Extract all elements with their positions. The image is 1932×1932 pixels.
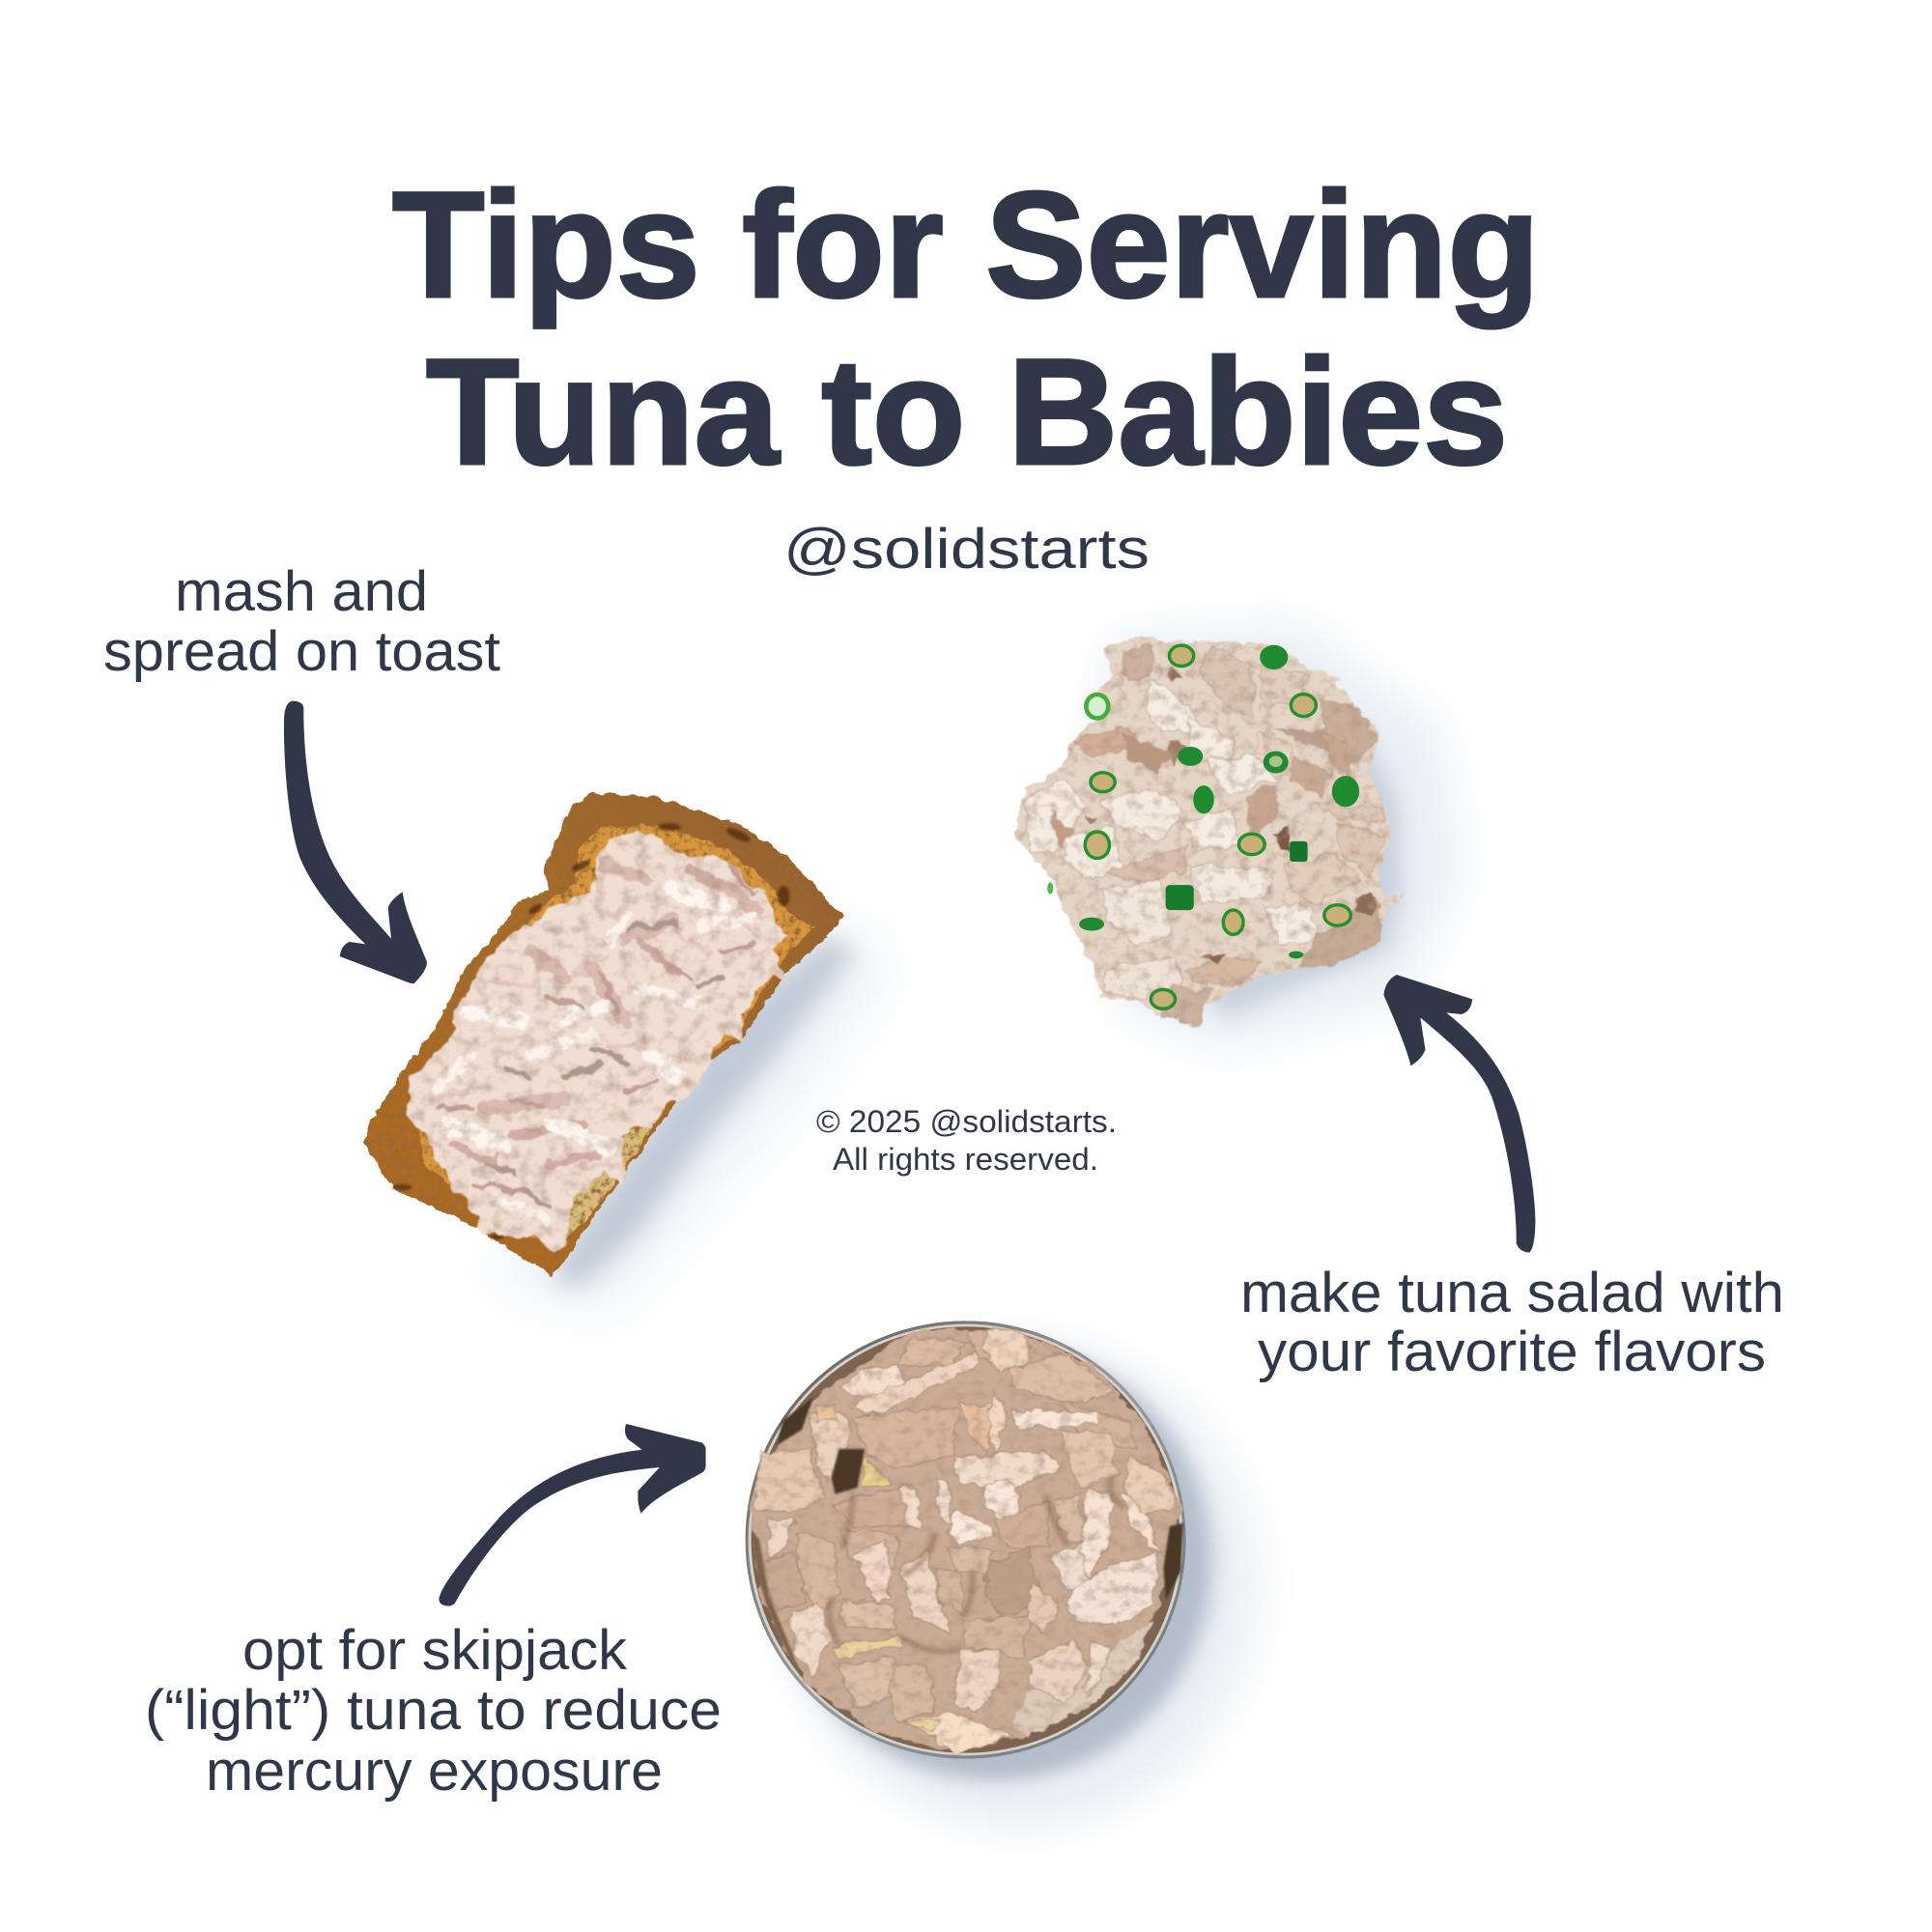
salad shadow (1077, 624, 1462, 1049)
copyright: All rights reserved. (833, 1142, 1098, 1177)
toast shadow (488, 918, 894, 1315)
can rim (746, 1321, 1186, 1759)
can interior (752, 1326, 1180, 1753)
label: mash and spread on toast: spread on toast (103, 620, 500, 683)
label: opt for skipjack (145, 1619, 722, 1803)
label: mash and spread on toast (103, 560, 500, 683)
chives (1047, 645, 1359, 1009)
toast pale crumb (531, 1121, 656, 1245)
can shadow (783, 1340, 1257, 1829)
label: mash and spread on toast: mash and (175, 560, 428, 623)
title (392, 161, 1540, 497)
photo: open can of tuna (746, 1321, 1257, 1829)
label: make tuna salad: your favorite flavors (1258, 1321, 1766, 1383)
salad mass (1014, 637, 1406, 1025)
dark gaps in can (752, 1398, 1183, 1681)
arrow: to can (439, 1424, 706, 1606)
toast golden interior (419, 825, 813, 1250)
title: Tips for Serving (392, 161, 1540, 329)
title: Tuna to Babies (426, 328, 1508, 497)
crevices in can (829, 1475, 1123, 1652)
arrow: to tuna salad (1383, 975, 1535, 1253)
label: opt for skipjack: (“light”) tuna to reduce (145, 1679, 722, 1742)
photo: tuna salad with chives (1014, 624, 1462, 1049)
copyright (816, 1104, 1117, 1177)
tuna spread (407, 832, 790, 1252)
tuna liquid (1012, 1620, 1153, 1736)
label: make tuna salad (1240, 1262, 1784, 1383)
handle: @solidstarts (783, 518, 1150, 581)
tuna base (751, 1330, 1182, 1755)
copyright: © 2025 @solidstarts. (816, 1104, 1117, 1139)
label: make tuna salad: make tuna salad with (1240, 1262, 1784, 1324)
chive white ring (1086, 695, 1108, 718)
chive rings (1085, 645, 1350, 1009)
tuna flakes in can (753, 1330, 1179, 1755)
arrow: to toast (284, 701, 427, 983)
toast dark bubbles (392, 823, 789, 1239)
tuna streaks on toast (432, 866, 755, 1220)
salad flakes (1029, 646, 1383, 1023)
photo: tuna on toast (363, 793, 894, 1315)
label: opt for skipjack: mercury exposure (206, 1740, 663, 1803)
toast crust (363, 793, 844, 1276)
chive solid pieces (1047, 645, 1359, 958)
label: opt for skipjack: opt for skipjack (242, 1619, 628, 1682)
